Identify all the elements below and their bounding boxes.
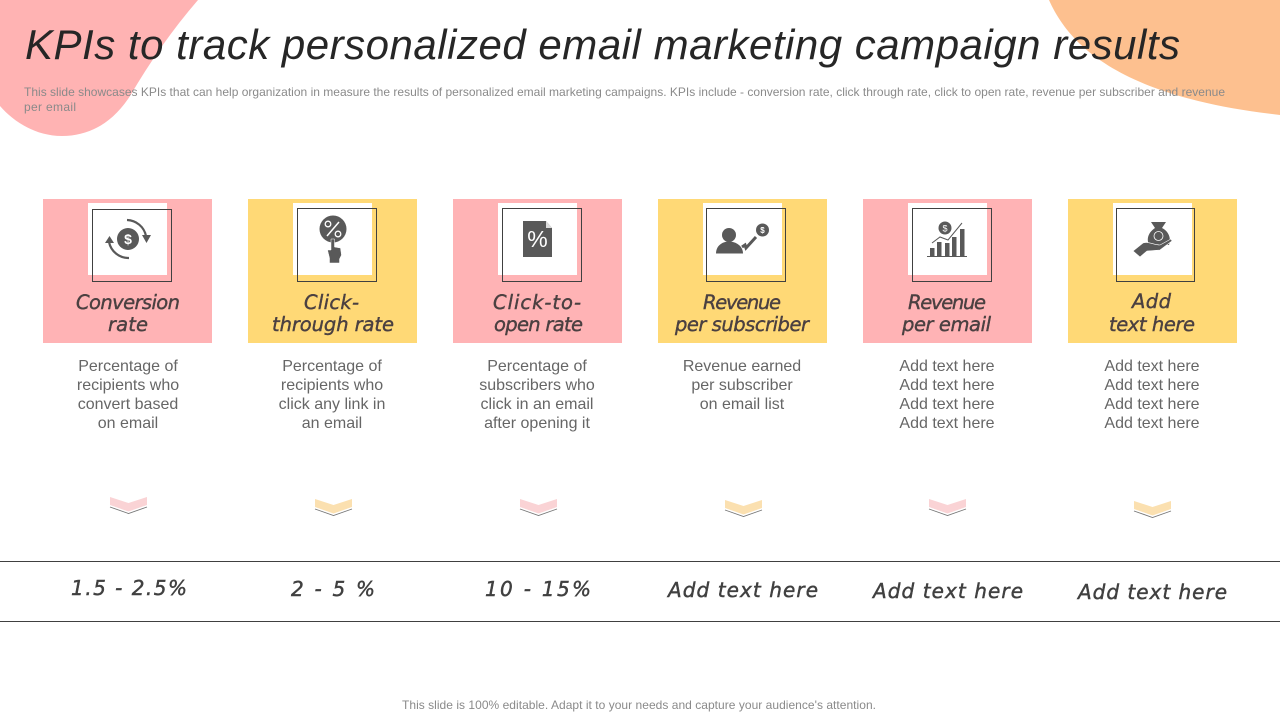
description: conversion rate: on email: [98, 415, 158, 432]
heading: add text here: [1109, 290, 1195, 336]
icon: growth bar chart: [927, 222, 967, 256]
panel: revenue per subscriber: [658, 199, 827, 343]
panel: click-to-open rate: [453, 199, 622, 343]
heading: revenue per email: per email: [901, 313, 992, 336]
description: click-to-open rate: subscribers who: [479, 377, 595, 394]
icon: person with revenue arrow: $: [760, 226, 765, 235]
arrow: chevron 2: [315, 499, 352, 516]
description: conversion rate: recipients who: [77, 377, 179, 394]
heading: conversion rate: [76, 291, 180, 336]
description: revenue per email: Add text here: [899, 377, 995, 394]
description: revenue per subscriber: on email list: [700, 396, 785, 413]
arrow: chevron 1: [110, 497, 147, 514]
icon: dollar cycle: $: [124, 231, 132, 247]
title: KPIs to track personalized email marketing campaign results: [25, 21, 1180, 68]
arrow: chevron 4: [725, 500, 762, 516]
description: revenue per subscriber: Revenue earned: [683, 358, 801, 375]
description: conversion rate: convert based: [78, 396, 178, 413]
description: revenue per email: Add text here: [899, 415, 995, 432]
description: add text here: Add text here: [1104, 396, 1200, 413]
heading: click-through rate: [272, 291, 394, 336]
heading: click-through rate: through rate: [272, 313, 394, 336]
decorative blob: orange top right: [1049, 0, 1280, 115]
icon: percent document: %: [527, 226, 548, 252]
arrow: chevron 5: [929, 499, 966, 516]
description: click-through rate: click any link in: [279, 396, 385, 413]
subtitle: [24, 85, 1225, 114]
icon: money bag on hand: [1133, 222, 1172, 257]
panel: revenue per email: [863, 199, 1032, 343]
panel: add text here: [1068, 199, 1237, 343]
value: click-to-open rate: 10 - 15%: [485, 577, 591, 601]
heading: click-to-open rate: [493, 291, 583, 336]
icon: percent document: [523, 221, 552, 257]
value: revenue per subscriber: Add text here: [666, 578, 818, 602]
panel: click-through rate: [248, 199, 417, 343]
arrow: chevron 6: [1134, 501, 1171, 518]
heading: click-to-open rate: Click-to-: [493, 291, 581, 314]
description: click-through rate: an email: [302, 415, 362, 432]
heading: conversion rate: rate: [108, 313, 148, 336]
description: add text here: Add text here: [1104, 358, 1200, 375]
value: add text here: Add text here: [1076, 580, 1227, 604]
description: click-through rate: recipients who: [281, 377, 383, 394]
description: add text here: Add text here: [1104, 415, 1200, 432]
heading: click-through rate: Click-: [304, 291, 359, 314]
description: click-to-open rate: Percentage of: [487, 358, 587, 375]
decorative blob: pink top left: [0, 0, 198, 136]
description: revenue per email: Add text here: [899, 358, 995, 375]
description: conversion rate: Percentage of: [78, 358, 178, 375]
heading: revenue per subscriber: per subscriber: [674, 313, 811, 336]
value: revenue per email: Add text here: [871, 579, 1023, 603]
heading: revenue per subscriber: Revenue: [703, 291, 781, 314]
heading: click-to-open rate: open rate: [494, 313, 583, 336]
description: click-through rate: Percentage of: [282, 358, 382, 375]
heading: add text here: Add: [1130, 290, 1172, 313]
heading: revenue per email: [901, 291, 992, 336]
footer note: This slide is 100% editable. Adapt it to your needs and capture your audience's attention.: [402, 698, 876, 712]
description: revenue per subscriber: per subscriber: [691, 377, 793, 394]
value: click-through rate: 2 - 5 %: [291, 577, 375, 601]
description: revenue per email: Add text here: [899, 396, 995, 413]
icon: dollar cycle: [105, 220, 151, 258]
description: add text here: Add text here: [1104, 377, 1200, 394]
heading: conversion rate: Conversion: [76, 291, 180, 314]
icon: growth bar chart: $: [942, 224, 948, 234]
heading: add text here: text here: [1109, 313, 1195, 336]
subtitle: per email: [24, 100, 76, 114]
heading: revenue per subscriber: [674, 291, 811, 336]
heading: revenue per email: Revenue: [908, 291, 986, 314]
panel: conversion rate: [43, 199, 212, 343]
value: conversion rate: 1.5 - 2.5%: [71, 576, 187, 600]
description: click-to-open rate: after opening it: [484, 415, 590, 432]
icon: percent click: [320, 216, 346, 263]
icon: person with revenue arrow: [716, 224, 769, 254]
subtitle: This slide showcases KPIs that can help organization in measure the results of personalized email marketing campaigns. KPIs include - conversion rate, click through rate, click to open rate, revenue per subscriber and revenue: [24, 85, 1225, 99]
description: click-to-open rate: click in an email: [481, 396, 593, 413]
arrow: chevron 3: [520, 499, 557, 516]
